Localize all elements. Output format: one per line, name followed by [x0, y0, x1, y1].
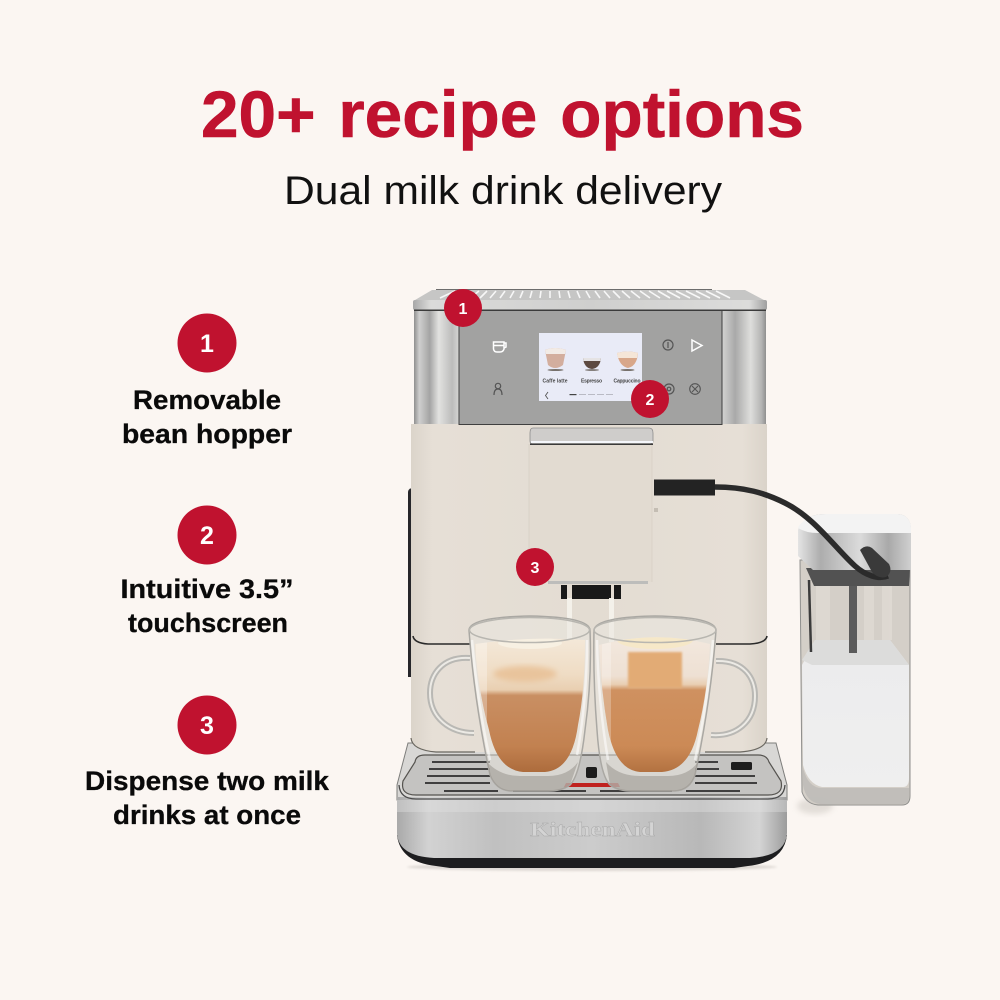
feature 1: removable bean hopper — [122, 314, 293, 449]
tray button — [731, 762, 752, 770]
grate slots — [425, 762, 757, 791]
small indicator dot — [654, 508, 658, 512]
drink labels: Caffe latte — [542, 378, 568, 384]
drink labels: Espresso — [581, 378, 602, 384]
feature 3: dispense two drinks: Dispense two milk — [85, 766, 330, 796]
tray rim back — [397, 743, 787, 800]
feature 3: dispense two drinks — [85, 696, 330, 830]
water tank edge — [408, 488, 412, 677]
glass rim — [470, 618, 590, 642]
hose connector — [860, 546, 890, 577]
dispenser handle — [530, 428, 653, 444]
feature 3: dispense two drinks: drinks at once — [113, 800, 301, 830]
drink labels: Cappuccino — [614, 378, 640, 384]
callout 3 — [516, 548, 554, 586]
glass base — [487, 762, 578, 791]
milk hose — [654, 480, 890, 577]
carafe base — [803, 768, 909, 804]
feature 2: intuitive touchscreen: 2 — [200, 522, 214, 550]
callout 1 — [444, 289, 482, 327]
coffee — [475, 638, 585, 772]
carafe shadow — [797, 798, 833, 814]
callout 3: 3 — [531, 560, 540, 577]
carafe glass — [800, 560, 910, 805]
steel front — [397, 797, 787, 858]
right mug — [594, 616, 755, 791]
grate surface — [403, 755, 781, 795]
feature 2: intuitive touchscreen: touchscreen — [128, 608, 288, 638]
black base — [397, 835, 787, 868]
glass highlight — [472, 640, 490, 760]
tray lower outline — [399, 785, 785, 799]
feature 1: removable bean hopper: Removable — [133, 385, 281, 415]
feature 2: intuitive touchscreen — [120, 506, 294, 638]
caffe latte cup — [545, 348, 566, 368]
callout 2: 2 — [646, 392, 655, 409]
mug handle — [430, 658, 474, 733]
dispenser front — [529, 428, 658, 599]
floor shadow — [407, 863, 777, 871]
title: 20+ recipe options — [201, 77, 804, 151]
icon: start — [692, 340, 702, 351]
milk streams — [567, 598, 614, 642]
feature 1: removable bean hopper: bean hopper — [122, 419, 293, 449]
touchscreen — [539, 333, 642, 401]
espresso cup — [583, 358, 601, 369]
callout 1: 1 — [459, 301, 468, 318]
red marker — [564, 783, 620, 787]
coffee machine illustration — [397, 289, 911, 871]
icon: profile — [494, 383, 502, 395]
drip tray — [397, 755, 787, 868]
left steel side — [414, 311, 459, 424]
left inner edge — [809, 580, 811, 652]
milk carafe — [797, 514, 911, 814]
back arrow — [546, 392, 548, 399]
cappuccino cup — [617, 352, 638, 368]
glass highlight — [597, 640, 608, 760]
icon: cancel — [690, 384, 700, 394]
logo: KitchenAid — [530, 819, 655, 841]
dip tube — [849, 583, 857, 653]
black spouts — [561, 585, 567, 599]
glass rim — [594, 618, 716, 642]
machine body — [411, 424, 767, 752]
spout plate — [548, 581, 648, 584]
left mug — [430, 616, 590, 791]
lower body seam — [413, 636, 767, 644]
glass stripes — [816, 586, 892, 640]
subtitle: Dual milk drink delivery — [284, 169, 722, 213]
feature 1: removable bean hopper: 1 — [200, 330, 214, 358]
icon: cup — [494, 342, 506, 352]
glass base — [606, 762, 698, 791]
icon: bean — [663, 340, 673, 350]
collar — [806, 568, 910, 586]
right steel side — [722, 311, 766, 424]
feature list — [85, 314, 330, 830]
drink labels — [542, 378, 640, 384]
coffee — [596, 631, 712, 774]
callout 2 — [631, 380, 669, 418]
glass outer — [594, 616, 716, 791]
glass outer — [469, 616, 590, 791]
mug handle — [711, 661, 755, 735]
feature 3: dispense two drinks: 3 — [200, 712, 214, 740]
carafe lid — [798, 514, 911, 570]
body bottom edge — [411, 738, 767, 752]
milk — [802, 640, 909, 787]
feature 2: intuitive touchscreen: Intuitive 3.5” — [120, 574, 294, 604]
icon: settings — [664, 384, 674, 394]
top grille and lid — [413, 290, 767, 311]
centre sensor — [586, 767, 597, 778]
page dots — [570, 394, 576, 395]
control panel — [459, 311, 722, 424]
